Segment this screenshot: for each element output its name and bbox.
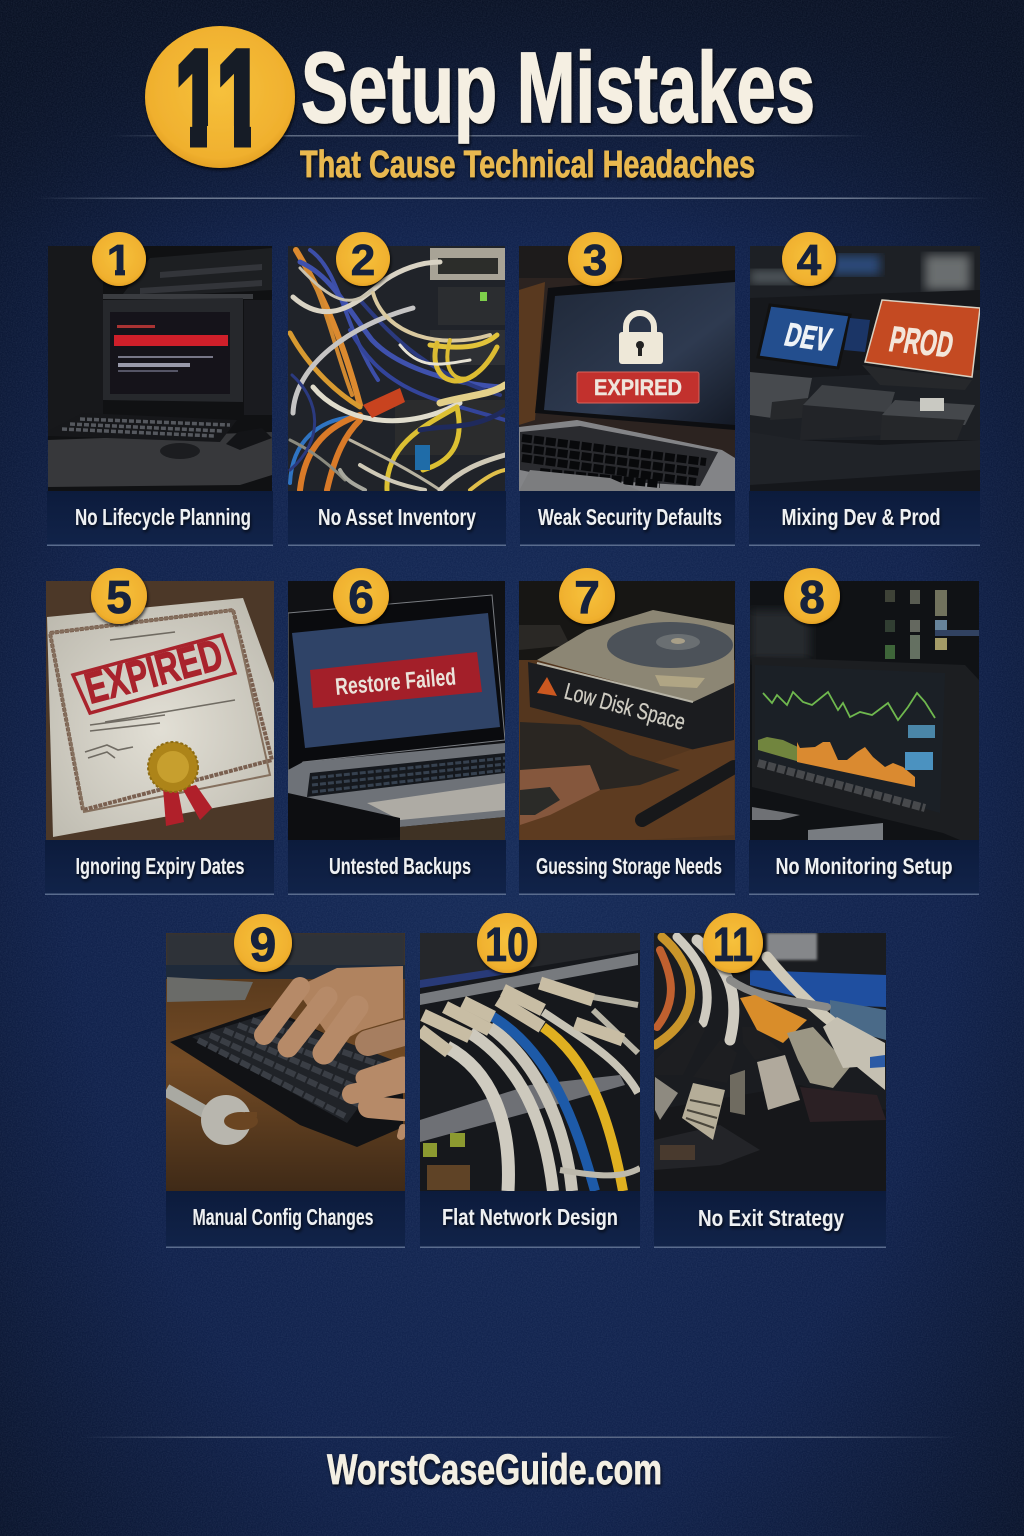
- label: Mixing Dev & Prod: [782, 504, 940, 530]
- warning triangle: [537, 677, 557, 696]
- expired stamp: EXPIRED: [80, 630, 228, 714]
- badge: 4: [782, 232, 836, 286]
- label: No Exit Strategy: [698, 1205, 844, 1231]
- badge: 11: [145, 24, 295, 173]
- panel 2: No Asset Inventory: [288, 232, 506, 546]
- hands: [264, 966, 403, 1136]
- badge: 7: 7: [574, 571, 600, 623]
- label: Guessing Storage Needs: [536, 853, 722, 879]
- label: [520, 491, 735, 546]
- badge: 11: 11: [713, 919, 753, 972]
- keyboard keys: [62, 419, 230, 436]
- keyboard keys: [198, 1020, 395, 1116]
- photo: tangled cables: [288, 246, 505, 491]
- label: [288, 491, 506, 546]
- label: Weak Security Defaults: [538, 504, 722, 530]
- badge: 10: 10: [485, 919, 529, 972]
- panel 3: Weak Security Defaults: [519, 232, 735, 546]
- badge: 3: [568, 232, 622, 286]
- label: No Asset Inventory: [318, 504, 476, 530]
- label: [749, 491, 980, 546]
- label: Ignoring Expiry Dates: [76, 853, 244, 879]
- badge: 5: [91, 568, 147, 624]
- drive label: Low Disk Space: [562, 678, 688, 735]
- label: [519, 840, 735, 895]
- bar chart: [758, 737, 800, 762]
- cable boots: [420, 983, 623, 1052]
- badge: 8: [784, 568, 840, 624]
- label: [45, 840, 274, 895]
- label: [749, 840, 979, 895]
- expired tag: EXPIRED: [594, 375, 682, 400]
- photo: rack console with alert screen: [48, 246, 272, 491]
- badge: 9: 9: [250, 919, 276, 972]
- badge: 6: 6: [348, 571, 374, 623]
- expired stamp: [73, 630, 235, 714]
- photo: dev and prod tags on hardware: [750, 246, 980, 491]
- photo: hard drive low disk space: [519, 581, 735, 840]
- panel 5: Ignoring Expiry Dates: [45, 568, 274, 895]
- label: No Monitoring Setup: [776, 853, 952, 879]
- restore failed banner: Restore Failed: [334, 664, 457, 701]
- expired tag: [577, 372, 699, 403]
- label: Untested Backups: [329, 853, 471, 879]
- label: Manual Config Changes: [192, 1204, 374, 1230]
- badge: 2: 2: [351, 236, 375, 285]
- badge: 3: 3: [583, 236, 607, 285]
- badge: 5: 5: [106, 571, 132, 623]
- photo: expired certificate: [46, 581, 274, 840]
- photo: dev and prod tags on hardware: DEV: [781, 317, 835, 359]
- heading: Setup Mistakes: [301, 32, 815, 144]
- keyboard keys: [522, 438, 706, 484]
- badge: 9: [234, 914, 292, 972]
- badge: 4: 4: [797, 236, 822, 285]
- badge: 8: 8: [799, 571, 825, 623]
- badge: 2: [336, 232, 390, 286]
- label: Flat Network Design: [442, 1204, 618, 1230]
- background windows: [885, 590, 979, 659]
- keyboard keys: [312, 758, 505, 792]
- photo: monitoring dashboard: [750, 581, 979, 840]
- label: [47, 491, 273, 546]
- restore failed banner: [310, 652, 482, 708]
- photo: pile of network connectors: [654, 933, 886, 1191]
- panel 11: No Exit Strategy: [654, 913, 886, 1248]
- website: WorstCaseGuide.com: [327, 1446, 662, 1494]
- panel 7: Guessing Storage Needs: [519, 568, 735, 895]
- panel 10: Flat Network Design: [420, 913, 640, 1248]
- badge: 1: [92, 232, 146, 286]
- panel 1: No Lifecycle Planning: [47, 232, 273, 546]
- photo: network cables in a switch: [420, 933, 640, 1191]
- badge: 7: [559, 568, 615, 624]
- keys: [750, 372, 975, 425]
- line chart: [763, 692, 935, 720]
- gold seal: [148, 742, 212, 826]
- label: [420, 1191, 640, 1248]
- label: [654, 1191, 886, 1248]
- connectors: [655, 995, 885, 1140]
- status tiles: [758, 763, 925, 808]
- photo: dev and prod tags on hardware: PROD: [886, 318, 957, 365]
- panel 6: Untested Backups: [288, 568, 506, 895]
- panel 9: Manual Config Changes: [166, 914, 405, 1248]
- label: No Lifecycle Planning: [75, 504, 251, 530]
- badge: 6: [333, 568, 389, 624]
- label: [288, 840, 506, 895]
- icon: wrench: [166, 1090, 258, 1145]
- photo: laptop restore failed: [288, 581, 505, 840]
- label: [166, 1191, 405, 1248]
- badge: 1: 1: [107, 236, 131, 285]
- title block: [145, 24, 815, 186]
- panel 8: No Monitoring Setup: [749, 568, 979, 895]
- icon: padlock: [619, 313, 663, 364]
- panel 4: Mixing Dev & Prod: [749, 232, 980, 546]
- photo: laptop with expired lock: [519, 246, 735, 491]
- header divider lines: [35, 135, 990, 199]
- subheading: That Cause Technical Headaches: [300, 144, 755, 186]
- badge: 11: 11: [175, 24, 263, 173]
- photo: hands on keyboard: [166, 933, 405, 1191]
